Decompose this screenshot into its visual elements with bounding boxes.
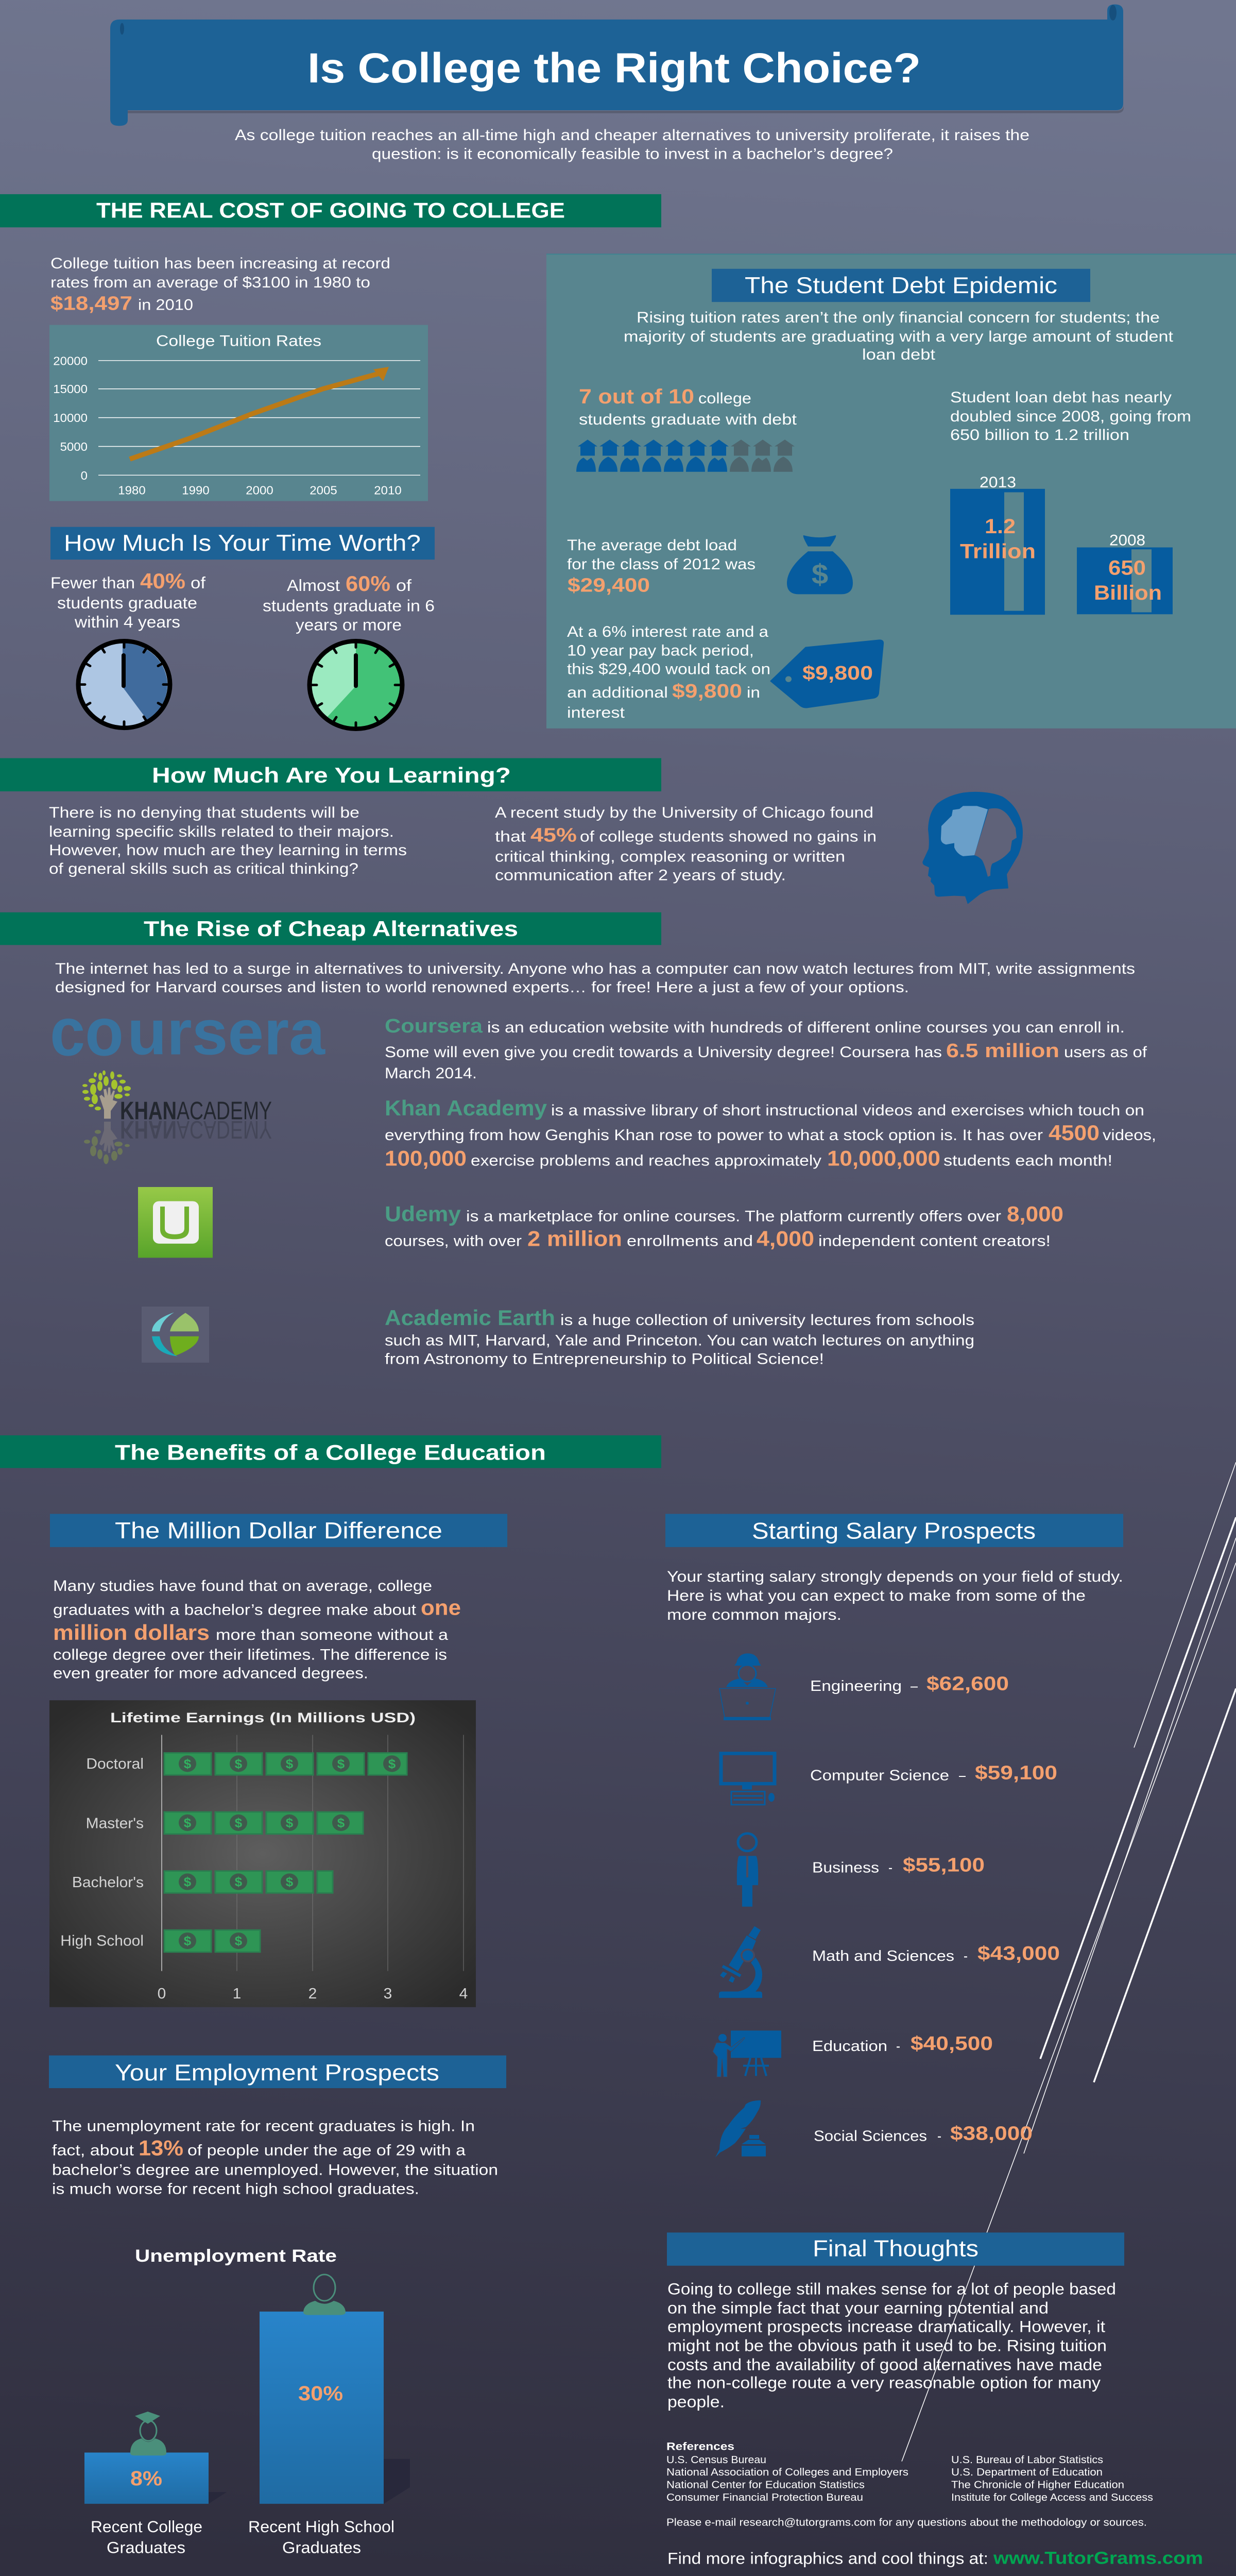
row: bachelors: $ bbox=[184, 1875, 191, 1889]
row: bachelors: $ bbox=[235, 1875, 242, 1889]
interest text: this $29,400 would tack on bbox=[567, 661, 770, 678]
bar: recent college graduates: 8% bbox=[130, 2467, 162, 2490]
bar chart: lifetime earnings: 0 bbox=[158, 1986, 166, 2002]
references: U.S. Department of Education bbox=[951, 2466, 1103, 2478]
subheader: starting salary prospects: Starting Salary Prospects bbox=[752, 1518, 1036, 1544]
tuition text: $18,497 bbox=[50, 293, 132, 314]
final thoughts text: people. bbox=[667, 2393, 725, 2411]
label: recent high school graduates: Graduates bbox=[282, 2538, 361, 2556]
line chart: college tuition rates: 1990 bbox=[182, 484, 210, 497]
panel intro text bbox=[624, 310, 1174, 363]
interest text: At a 6% interest rate and a bbox=[567, 624, 768, 640]
salary row: computer science bbox=[810, 1762, 1057, 1784]
line chart: college tuition rates: 2010 bbox=[374, 484, 402, 497]
references: Consumer Financial Protection Bureau bbox=[666, 2492, 863, 2503]
text: udemy: enrollments and bbox=[627, 1233, 753, 1249]
salary row: education: Education bbox=[812, 2039, 887, 2055]
icon: money bag: $ bbox=[812, 558, 828, 590]
label: recent college graduates: Recent College bbox=[91, 2518, 202, 2536]
panel intro text: majority of students are graduating with a very large amount of student bbox=[624, 329, 1174, 345]
million dollar text bbox=[53, 1578, 461, 1682]
bar: 2013: 2013 bbox=[980, 474, 1016, 491]
salary row: computer science: – bbox=[959, 1768, 966, 1784]
salary row: engineering bbox=[810, 1673, 1009, 1694]
salary row: engineering: – bbox=[911, 1679, 918, 1694]
salary row: education bbox=[812, 2033, 993, 2055]
text: khan academy: 10,000,000 bbox=[827, 1146, 940, 1171]
loan debt text: 650 billion to 1.2 trillion bbox=[950, 427, 1129, 444]
tuition text: rates from an average of $3100 in 1980 to bbox=[50, 274, 370, 291]
label: recent college graduates: Graduates bbox=[107, 2538, 185, 2556]
interest text: 10 year pay back period, bbox=[567, 642, 754, 659]
references: National Center for Education Statistics bbox=[666, 2479, 865, 2490]
text: khan academy: is a massive library of short instructional videos and exercises which touch on bbox=[551, 1102, 1144, 1119]
row: masters: $ bbox=[184, 1816, 191, 1830]
row: bachelors: $ bbox=[286, 1875, 293, 1889]
logo: khan academy bbox=[82, 1071, 272, 1164]
employment text: fact, about bbox=[52, 2142, 134, 2159]
employment text: bachelor’s degree are unemployed. However, the situation bbox=[52, 2162, 498, 2178]
section header: how much are you learning: How Much Are You Learning? bbox=[152, 764, 511, 788]
stat: 40 percent: 40% bbox=[140, 569, 185, 594]
icon: microscope bbox=[719, 1926, 762, 1998]
text: coursera bbox=[385, 1015, 1147, 1082]
learning text left: There is no denying that students will be bbox=[49, 805, 359, 821]
learning text left: learning specific skills related to their majors. bbox=[49, 824, 394, 840]
stat: 60 percent: of bbox=[396, 577, 411, 595]
bar chart: lifetime earnings bbox=[49, 1700, 476, 2007]
icon: price tag: $9,800 bbox=[802, 663, 873, 684]
text: udemy: courses, with over bbox=[385, 1233, 522, 1249]
icon: price tag bbox=[770, 639, 884, 708]
bar: 2013: 1.2 bbox=[985, 515, 1016, 538]
text: academic earth: is a huge collection of university lectures from schools bbox=[560, 1312, 974, 1329]
icon: clock 60 percent bbox=[310, 641, 402, 729]
bar chart: lifetime earnings: Master's bbox=[86, 1816, 144, 1832]
logo: udemy bbox=[138, 1187, 213, 1258]
references: National Association of Colleges and Employers bbox=[666, 2466, 908, 2478]
stat: 60 percent: years or more bbox=[296, 616, 402, 634]
salary row: engineering: $62,600 bbox=[926, 1673, 1009, 1694]
icon: graduate bbox=[130, 2412, 166, 2455]
stat: 40 percent: within 4 years bbox=[74, 613, 180, 631]
subheader: the million dollar difference: The Million Dollar Difference bbox=[115, 1518, 442, 1544]
learning text right bbox=[495, 805, 877, 884]
footer call to action: www.TutorGrams.com bbox=[993, 2548, 1203, 2568]
section header: the benefits of a college education bbox=[0, 1435, 661, 1468]
salary row: engineering: Engineering bbox=[810, 1679, 902, 1694]
label: recent college graduates bbox=[91, 2518, 202, 2556]
section header: how much are you learning bbox=[0, 758, 661, 791]
row: masters: $ bbox=[235, 1816, 242, 1830]
average debt text: The average debt load bbox=[567, 537, 737, 554]
subtitle: As college tuition reaches an all-time high and cheaper alternatives to university proliferate, it raises the bbox=[235, 127, 1029, 144]
text: khan academy: everything from how Genghis Khan rose to power to what a stock option is. It has over bbox=[385, 1127, 1043, 1144]
chart: unemployment rate bbox=[84, 2246, 410, 2556]
stat: 7 out of 10: college bbox=[698, 391, 751, 407]
employment text: is much worse for recent high school graduates. bbox=[52, 2181, 419, 2197]
stat: 40 percent: of bbox=[191, 574, 205, 592]
salary row: social sciences bbox=[814, 2123, 1033, 2144]
text: khan academy: Khan Academy bbox=[385, 1096, 547, 1120]
subheader: how much is your time worth bbox=[50, 527, 435, 560]
panel heading: The Student Debt Epidemic bbox=[745, 273, 1057, 298]
row: high school: $ bbox=[235, 1934, 242, 1948]
line chart: college tuition rates: 20000 bbox=[53, 354, 88, 367]
text: academic earth: such as MIT, Harvard, Yale and Princeton. You can watch lectures on anything bbox=[385, 1332, 974, 1349]
alternatives intro text bbox=[55, 961, 1135, 996]
text: coursera: users as of bbox=[1064, 1044, 1147, 1061]
employment text: The unemployment rate for recent graduates is high. In bbox=[52, 2118, 475, 2134]
bar: 2013 bbox=[950, 474, 1045, 615]
salary text bbox=[667, 1569, 1123, 1623]
million dollar text: one bbox=[421, 1596, 461, 1620]
salary row: math and sciences: Math and Sciences bbox=[812, 1948, 954, 1964]
panel intro text: Rising tuition rates aren’t the only financial concern for students; the bbox=[637, 310, 1160, 326]
logo: coursera: co bbox=[50, 994, 124, 1070]
salary row: math and sciences: $43,000 bbox=[977, 1943, 1060, 1964]
references: Institute for College Access and Success bbox=[951, 2492, 1153, 2503]
stat: 40 percent: Fewer than bbox=[50, 574, 135, 592]
average debt text bbox=[567, 537, 756, 596]
bar chart: lifetime earnings: 2 bbox=[308, 1986, 317, 2002]
line chart: college tuition rates: 0 bbox=[81, 469, 88, 482]
subheader: starting salary prospects bbox=[665, 1514, 1123, 1547]
text: coursera: is an education website with hundreds of different online courses you can enroll in. bbox=[487, 1020, 1125, 1036]
million dollar text: million dollars bbox=[53, 1621, 210, 1645]
section header: the rise of cheap alternatives: The Rise of Cheap Alternatives bbox=[144, 917, 518, 941]
text: khan academy: exercise problems and reaches approximately bbox=[471, 1153, 822, 1169]
bar chart: lifetime earnings: 3 bbox=[384, 1986, 392, 2002]
average debt text: $29,400 bbox=[568, 575, 650, 596]
contact note: Please e-mail research@tutorgrams.com for any questions about the methodology or sources. bbox=[666, 2517, 1147, 2528]
icon: money bag bbox=[787, 535, 853, 594]
bar chart: lifetime earnings: Bachelor's bbox=[72, 1875, 144, 1891]
icon: computer bbox=[721, 1753, 775, 1805]
logo: coursera bbox=[50, 994, 326, 1070]
final thoughts text: costs and the availability of good alternatives have made bbox=[667, 2355, 1102, 2374]
row: doctoral: $ bbox=[388, 1757, 396, 1771]
pictogram: 7 of 10 graduates bbox=[576, 439, 795, 472]
interest text: $9,800 bbox=[672, 681, 742, 702]
alternatives intro text: designed for Harvard courses and listen to world renowned experts… for free! Here a just a few of your options. bbox=[55, 979, 909, 996]
row: masters bbox=[164, 1812, 363, 1834]
row: bachelors bbox=[164, 1871, 333, 1893]
bar: recent high school graduates: 30% bbox=[298, 2382, 343, 2405]
references: U.S. Census Bureau bbox=[666, 2454, 766, 2466]
chart: unemployment rate: Unemployment Rate bbox=[135, 2246, 337, 2266]
final thoughts text: employment prospects increase dramatically. However, it bbox=[667, 2317, 1105, 2335]
line chart: college tuition rates bbox=[49, 325, 428, 501]
learning text left bbox=[49, 805, 407, 877]
line chart: college tuition rates: 2005 bbox=[310, 484, 337, 497]
references: U.S. Bureau of Labor Statistics bbox=[951, 2454, 1103, 2466]
salary row: education: $40,500 bbox=[911, 2033, 993, 2055]
salary row: math and sciences bbox=[812, 1943, 1060, 1964]
stat: 7 out of 10: 7 out of 10 bbox=[579, 385, 694, 408]
salary row: math and sciences: - bbox=[964, 1948, 968, 1964]
salary text: Here is what you can expect to make from some of the bbox=[667, 1588, 1086, 1604]
loan debt text bbox=[950, 389, 1191, 444]
icon: teacher at board bbox=[713, 2030, 781, 2077]
million dollar text: graduates with a bachelor’s degree make about bbox=[53, 1602, 417, 1618]
section header: the benefits of a college education: The Benefits of a College Education bbox=[115, 1440, 546, 1465]
stat: 60 percent: Almost bbox=[287, 577, 340, 595]
bar: 2008: 650 bbox=[1108, 556, 1146, 579]
icon: quill and ink bbox=[715, 2100, 766, 2158]
salary row: computer science: Computer Science bbox=[810, 1768, 949, 1784]
subheader: the million dollar difference bbox=[50, 1514, 507, 1547]
row: doctoral: $ bbox=[235, 1757, 242, 1771]
text: khan academy: 100,000 bbox=[385, 1146, 467, 1171]
row: masters: $ bbox=[337, 1816, 345, 1830]
stat: 40 percent: students graduate bbox=[57, 594, 197, 612]
row: doctoral: $ bbox=[286, 1757, 293, 1771]
stat: 40 percent bbox=[50, 569, 205, 631]
learning text right: communication after 2 years of study. bbox=[495, 867, 786, 884]
icon: head with brain bbox=[922, 792, 1023, 904]
references: References bbox=[666, 2441, 734, 2453]
text: udemy: is a marketplace for online courses. The platform currently offers over bbox=[466, 1208, 1001, 1225]
alternatives intro text: The internet has led to a surge in alternatives to university. Anyone who has a computer can now watch lectures from MIT, write assignments bbox=[55, 961, 1135, 977]
salary row: social sciences: - bbox=[937, 2128, 941, 2144]
loan debt text: Student loan debt has nearly bbox=[950, 389, 1172, 406]
subheader: your employment prospects bbox=[49, 2056, 506, 2088]
bar: recent high school graduates bbox=[260, 2312, 384, 2504]
row: high school: $ bbox=[184, 1934, 191, 1948]
logo: khan academy: KHAN bbox=[120, 1115, 177, 1144]
learning text left: of general skills such as critical thinking? bbox=[49, 861, 358, 877]
text: academic earth bbox=[385, 1306, 974, 1368]
bar: 2008: 2008 bbox=[1109, 532, 1145, 549]
million dollar text: Many studies have found that on average, college bbox=[53, 1578, 432, 1595]
text: udemy: independent content creators! bbox=[818, 1233, 1051, 1249]
interest text bbox=[567, 624, 770, 721]
bar chart: lifetime earnings: 1 bbox=[233, 1986, 241, 2002]
subheader: final thoughts: Final Thoughts bbox=[813, 2236, 978, 2261]
stat: 7 out of 10 bbox=[579, 385, 797, 428]
line chart: college tuition rates: College Tuition Rates bbox=[156, 333, 321, 349]
tuition text: in 2010 bbox=[138, 297, 193, 313]
logo: khan academy: ACADEMY bbox=[177, 1115, 272, 1144]
salary row: business: - bbox=[888, 1860, 892, 1876]
employment text: of people under the age of 29 with a bbox=[187, 2142, 466, 2159]
salary row: computer science: $59,100 bbox=[975, 1762, 1057, 1784]
row: high school bbox=[164, 1930, 260, 1952]
text: khan academy bbox=[385, 1096, 1156, 1171]
salary text: Your starting salary strongly depends on your field of study. bbox=[667, 1569, 1123, 1585]
salary row: education: - bbox=[896, 2039, 900, 2055]
text: khan academy: 4500 bbox=[1049, 1121, 1100, 1145]
title: Is College the Right Choice? bbox=[307, 44, 921, 92]
line chart: college tuition rates: 5000 bbox=[60, 440, 88, 453]
million dollar text: more than someone without a bbox=[216, 1626, 448, 1643]
text: udemy: 8,000 bbox=[1007, 1202, 1063, 1226]
subheader: final thoughts bbox=[667, 2232, 1124, 2266]
text: coursera: Coursera bbox=[385, 1015, 483, 1037]
row: doctoral bbox=[164, 1753, 407, 1775]
learning text right: 45% bbox=[530, 824, 577, 846]
stat: 60 percent bbox=[263, 572, 435, 634]
footer call to action bbox=[667, 2548, 1203, 2568]
final thoughts text: on the simple fact that your earning potential and bbox=[667, 2299, 1049, 2317]
references bbox=[666, 2441, 1153, 2503]
line chart: college tuition rates: 2000 bbox=[246, 484, 273, 497]
text: coursera: Some will even give you credit towards a University degree! Coursera has bbox=[385, 1044, 942, 1061]
final thoughts text bbox=[667, 2280, 1116, 2411]
learning text left: However, how much are they learning in terms bbox=[49, 842, 407, 859]
text: udemy: Udemy bbox=[385, 1202, 461, 1226]
interest text: interest bbox=[567, 705, 625, 721]
icon: high school student bbox=[303, 2275, 346, 2315]
icon: businessperson bbox=[737, 1834, 758, 1907]
bar chart: lifetime earnings: High School bbox=[60, 1933, 144, 1949]
label: recent high school graduates: Recent High School bbox=[248, 2518, 394, 2536]
logo: coursera: ursera bbox=[127, 997, 326, 1068]
row: doctoral: $ bbox=[337, 1757, 345, 1771]
salary text: more common majors. bbox=[667, 1607, 842, 1623]
salary row: business: Business bbox=[812, 1860, 879, 1876]
stat: 60 percent: 60% bbox=[346, 572, 390, 596]
average debt text: for the class of 2012 was bbox=[567, 556, 756, 573]
learning text right: that bbox=[495, 828, 526, 845]
final thoughts text: the non-college route a very reasonable option for many bbox=[667, 2374, 1101, 2392]
line chart: college tuition rates: 15000 bbox=[53, 383, 88, 396]
employment text bbox=[52, 2118, 498, 2197]
bar: 2008 bbox=[1077, 532, 1173, 614]
interest text: in bbox=[747, 685, 760, 701]
stat: 7 out of 10: students graduate with debt bbox=[579, 412, 797, 428]
salary row: business bbox=[812, 1855, 985, 1876]
logo: khan academy: ACADEMY bbox=[177, 1096, 272, 1125]
panel: the student debt epidemic bbox=[546, 253, 1236, 728]
footer call to action: Find more infographics and cool things at: bbox=[667, 2549, 988, 2567]
text: coursera: 6.5 million bbox=[946, 1040, 1059, 1062]
panel intro text: loan debt bbox=[862, 347, 936, 363]
stat: 60 percent: students graduate in 6 bbox=[263, 597, 435, 615]
text: khan academy: videos, bbox=[1103, 1127, 1156, 1144]
bar: recent college graduates bbox=[84, 2452, 209, 2504]
loan debt text: doubled since 2008, going from bbox=[950, 409, 1191, 425]
logo: khan academy: KHAN bbox=[120, 1096, 177, 1125]
text: coursera: March 2014. bbox=[385, 1065, 477, 1082]
salary row: business: $55,100 bbox=[903, 1855, 985, 1876]
references: The Chronicle of Higher Education bbox=[951, 2479, 1124, 2490]
employment text: 13% bbox=[139, 2137, 183, 2160]
subheader: your employment prospects: Your Employment Prospects bbox=[115, 2060, 439, 2086]
final thoughts text: Going to college still makes sense for a lot of people based bbox=[667, 2280, 1116, 2298]
text: academic earth: Academic Earth bbox=[385, 1306, 555, 1330]
salary row: social sciences: Social Sciences bbox=[814, 2128, 927, 2144]
section header: the real cost: THE REAL COST OF GOING TO COLLEGE bbox=[96, 198, 565, 223]
section header: the rise of cheap alternatives bbox=[0, 912, 661, 945]
title banner bbox=[110, 5, 1124, 126]
salary row: social sciences: $38,000 bbox=[950, 2123, 1033, 2144]
text: khan academy: students each month! bbox=[943, 1153, 1112, 1169]
million dollar text: college degree over their lifetimes. The difference is bbox=[53, 1647, 447, 1663]
tuition text bbox=[50, 256, 390, 314]
bar chart: lifetime earnings: 4 bbox=[459, 1986, 468, 2002]
row: masters: $ bbox=[286, 1816, 293, 1830]
bar: 2008: Billion bbox=[1094, 581, 1162, 604]
section header: the real cost bbox=[0, 194, 661, 227]
learning text right: A recent study by the University of Chicago found bbox=[495, 805, 873, 821]
text: udemy bbox=[385, 1202, 1063, 1251]
icon: engineer bbox=[719, 1653, 776, 1720]
logo: academic earth bbox=[142, 1307, 209, 1363]
text: udemy: 2 million bbox=[527, 1227, 622, 1251]
bar: 2013: Trillion bbox=[960, 539, 1036, 563]
bar chart: lifetime earnings: Doctoral bbox=[86, 1756, 144, 1772]
subheader: how much is your time worth: How Much Is Your Time Worth? bbox=[64, 530, 421, 556]
bar chart: lifetime earnings: Lifetime Earnings (In Millions USD) bbox=[110, 1709, 416, 1725]
text: academic earth: from Astronomy to Entrepreneurship to Political Science! bbox=[385, 1351, 824, 1368]
interest text: an additional bbox=[567, 685, 668, 701]
learning text right: critical thinking, complex reasoning or written bbox=[495, 849, 845, 865]
tuition text: College tuition has been increasing at record bbox=[50, 256, 390, 272]
text: udemy: 4,000 bbox=[757, 1227, 814, 1251]
row: doctoral: $ bbox=[184, 1757, 191, 1771]
subtitle bbox=[235, 127, 1029, 163]
learning text right: of college students showed no gains in bbox=[580, 828, 877, 845]
subtitle: question: is it economically feasible to invest in a bachelor’s degree? bbox=[372, 146, 893, 163]
label: recent high school graduates bbox=[248, 2518, 394, 2556]
icon: clock 40 percent bbox=[78, 641, 170, 728]
line chart: college tuition rates: 10000 bbox=[53, 412, 88, 425]
million dollar text: even greater for more advanced degrees. bbox=[53, 1665, 368, 1682]
line chart: college tuition rates: 1980 bbox=[118, 484, 146, 497]
final thoughts text: might not be the obvious path it used to be. Rising tuition bbox=[667, 2336, 1107, 2354]
panel heading bbox=[712, 269, 1090, 302]
